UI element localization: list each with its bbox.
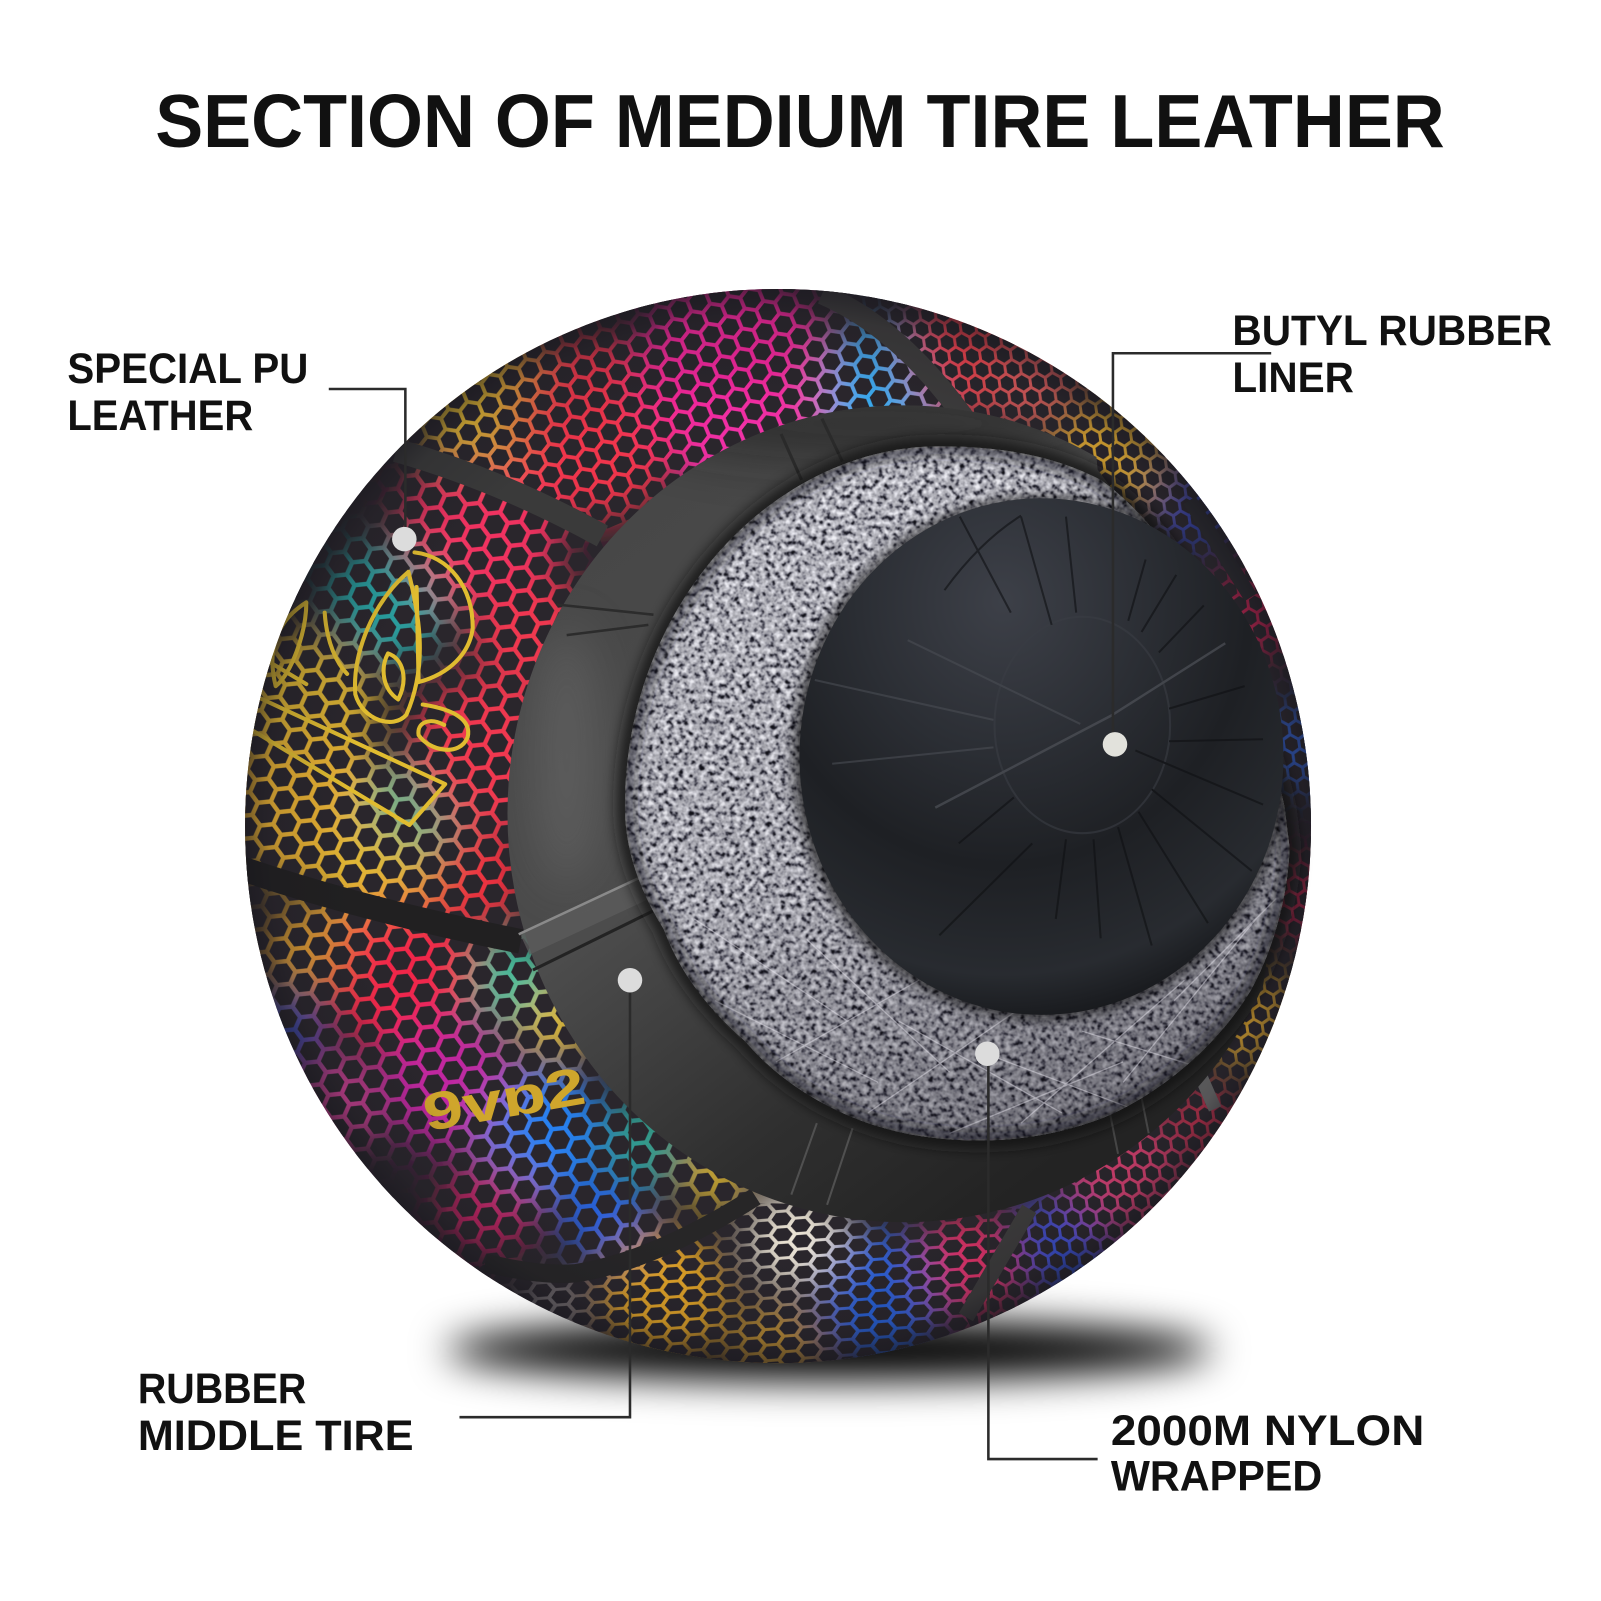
nylon wrap	[613, 434, 1307, 1154]
callout: 2000m nylon wrapped: WRAPPED	[1111, 1453, 1322, 1501]
callout: rubber middle tire	[138, 968, 642, 1460]
callout: butyl rubber liner: LINER	[1232, 354, 1354, 402]
basketball	[235, 276, 1343, 1389]
ground shadow	[446, 1319, 1212, 1380]
edge vignette	[235, 276, 1327, 1378]
hexagon texture: bottom panel	[478, 1203, 1020, 1364]
callout: 2000m nylon wrapped: 2000M NYLON	[1111, 1407, 1424, 1455]
callout: rubber middle tire: RUBBER	[138, 1365, 306, 1413]
callout: butyl rubber liner: BUTYL RUBBER	[1232, 307, 1552, 355]
tire shading	[532, 387, 1113, 888]
liner ribs	[815, 516, 1263, 945]
bottom gold logo lettering: 9vɒ2	[419, 1057, 590, 1143]
callout: butyl rubber liner	[1103, 307, 1552, 757]
callout: special PU leather: SPECIAL PU	[67, 345, 308, 393]
hexagon texture: left panels	[245, 451, 746, 1270]
panel colour base	[235, 276, 1343, 1389]
panel seams	[240, 294, 1251, 1317]
middle tire crescent	[507, 387, 1300, 1222]
hexagon texture: right panel	[828, 291, 1311, 1326]
nylon fibres	[694, 899, 1276, 1133]
callout: 2000m nylon wrapped	[975, 1041, 1424, 1501]
callout: special PU leather: LEATHER	[67, 392, 253, 440]
tire seams	[519, 419, 1149, 1205]
hexagon texture: top panel	[398, 289, 944, 528]
gold logo	[245, 552, 473, 825]
title: SECTION OF MEDIUM TIRE LEATHER	[155, 80, 1445, 164]
callout: rubber middle tire: MIDDLE TIRE	[138, 1412, 414, 1460]
butyl rubber liner	[799, 498, 1283, 1015]
callout: special PU leather	[67, 345, 417, 551]
